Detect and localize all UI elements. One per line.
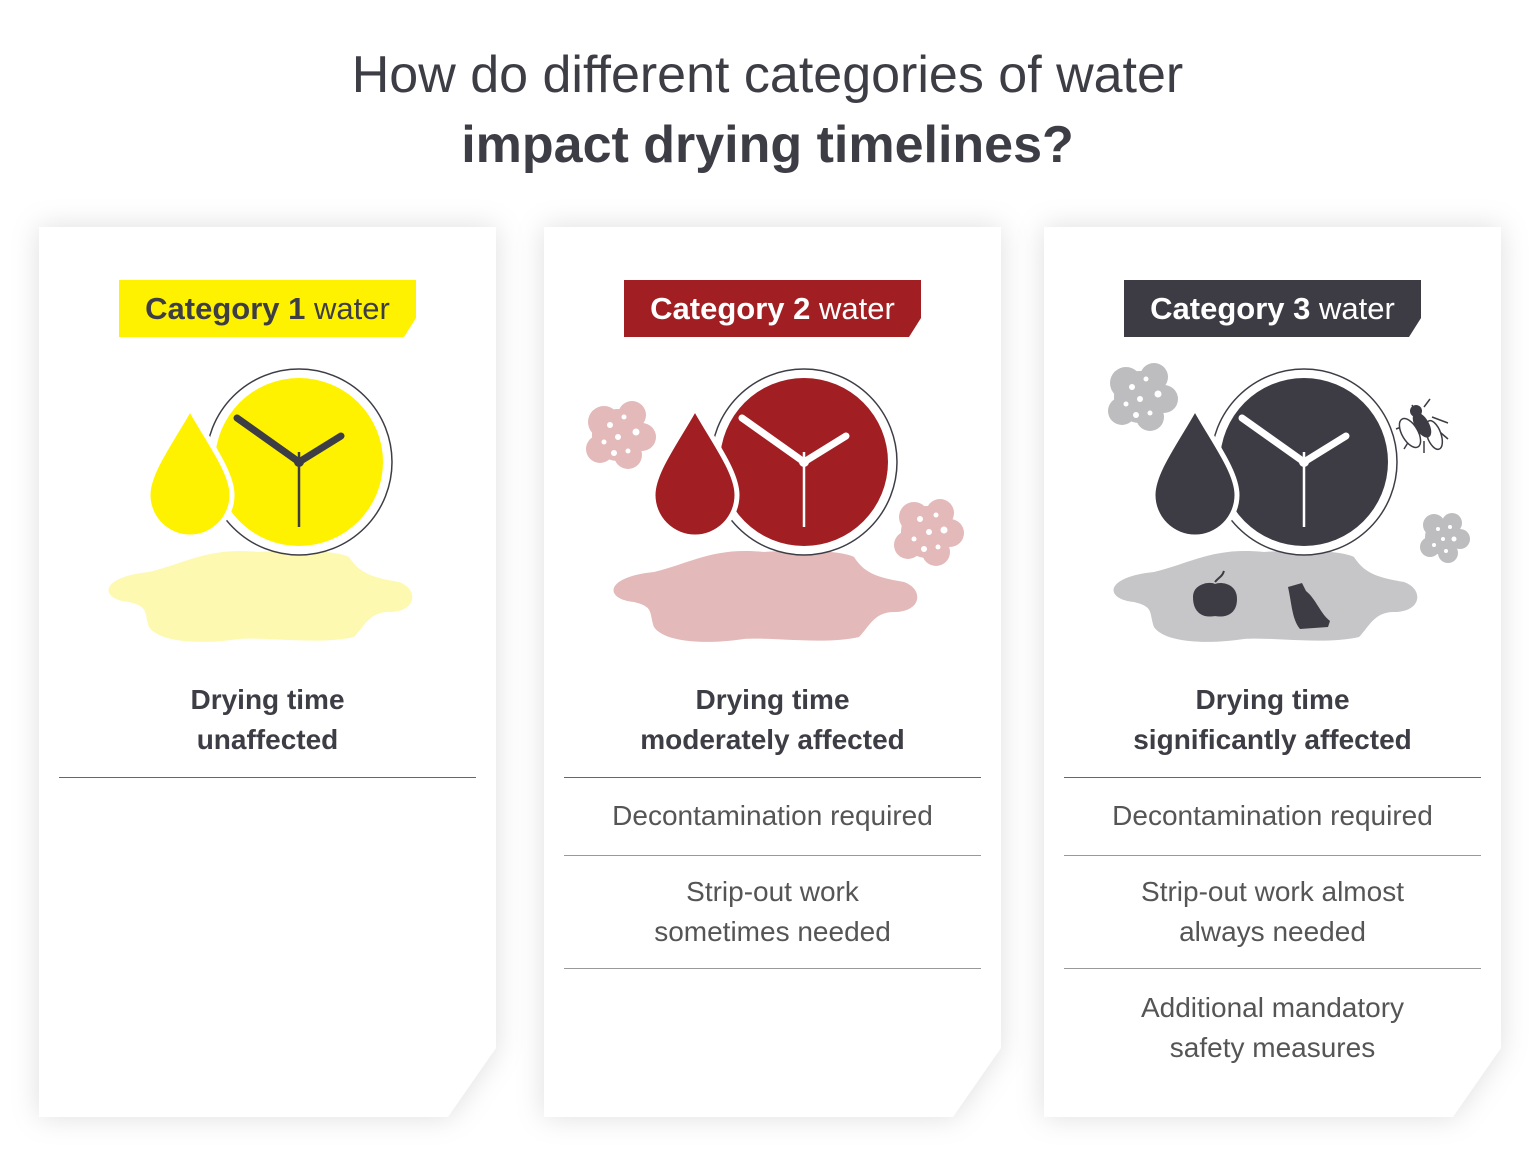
badge: category 1	[119, 280, 416, 337]
heading: drying time moderately affected: moderately affected	[640, 724, 905, 755]
badge: category 2: Category 2 water	[650, 291, 895, 326]
heading: drying time unaffected: unaffected	[197, 724, 338, 755]
badge: category 3	[1124, 280, 1421, 337]
text: strip-out sometimes	[655, 881, 889, 942]
title: impact drying timelines?	[461, 116, 1074, 174]
text: safety measures: Additional mandatory	[1141, 992, 1404, 1023]
panel: category 3	[1035, 218, 1510, 1126]
heading: drying time unaffected	[192, 689, 344, 750]
heading: drying time significantly affected: significantly affected	[1133, 724, 1412, 755]
heading: drying time moderately affected	[642, 689, 903, 755]
text: strip-out almost always: always needed	[1179, 916, 1366, 947]
text: decontamination required: Decontamination required	[1112, 800, 1433, 831]
title: How do different categories of water	[352, 46, 1183, 104]
panel: category 2	[535, 218, 1010, 1126]
panel: category 1	[30, 218, 505, 1126]
text: decontamination required: Decontamination required	[612, 800, 933, 831]
badge: category 2	[624, 280, 921, 337]
text: strip-out almost always: Strip-out work almost	[1141, 876, 1404, 907]
text: strip-out sometimes: sometimes needed	[654, 916, 891, 947]
heading: drying time significantly affected	[1134, 689, 1410, 755]
title	[352, 46, 1183, 174]
text: strip-out sometimes: Strip-out work	[686, 876, 859, 907]
text: safety measures	[1141, 997, 1404, 1063]
text: safety measures: safety measures	[1170, 1032, 1375, 1063]
heading: drying time moderately affected: Drying time	[695, 684, 850, 715]
icon: clock with drop, mould, fly and debris puddle	[1108, 363, 1470, 642]
text: strip-out almost always	[1142, 881, 1404, 947]
icon: clock with drop, bacteria and puddle 2	[586, 368, 964, 642]
icon: clock with drop and puddle 1	[108, 368, 412, 642]
heading: drying time significantly affected: Drying time	[1195, 684, 1350, 715]
badge: category 1: Category 1 water	[145, 291, 390, 326]
heading: drying time unaffected: Drying time	[190, 684, 345, 715]
badge: category 3: Category 3 water	[1150, 291, 1395, 326]
